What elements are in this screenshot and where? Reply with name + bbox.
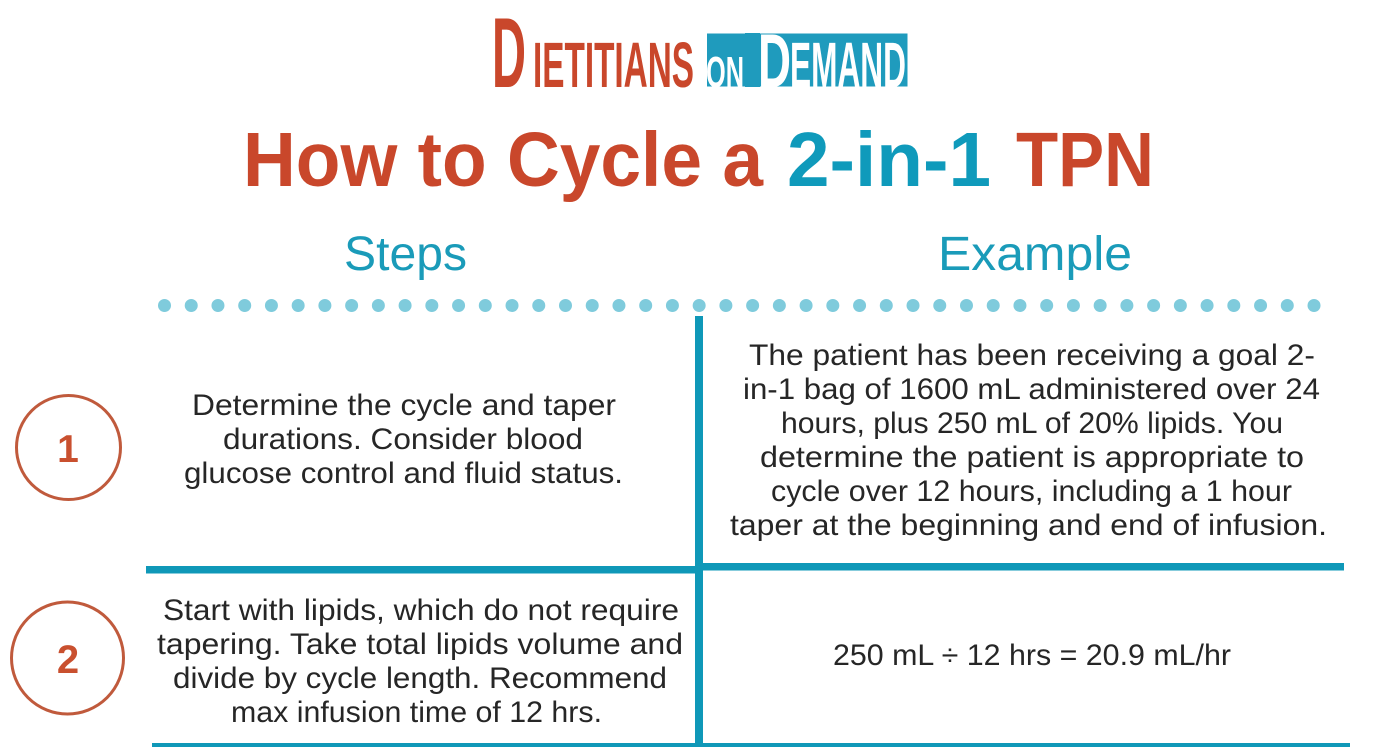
title: How to Cycle a xyxy=(243,117,764,203)
step 1 number badge: 1 xyxy=(57,428,79,471)
step 2 text xyxy=(157,594,683,729)
step 2 text: divide by cycle length. Recommend xyxy=(173,662,667,695)
logo: Dietitians on Demand: IETITIANS xyxy=(533,29,694,101)
step 1 text: durations. Consider blood xyxy=(223,423,583,456)
step 1 example text: determine the patient is appropriate to xyxy=(760,441,1304,474)
step 1 example text: taper at the beginning and end of infusion. xyxy=(730,509,1327,542)
step 1 text: Determine the cycle and taper xyxy=(192,389,616,422)
title xyxy=(243,117,1154,203)
title: 2-in-1 xyxy=(787,117,991,203)
step 1 example text: cycle over 12 hours, including a 1 hour xyxy=(771,475,1292,508)
logo: Dietitians on Demand: ON xyxy=(706,48,744,97)
logo: Dietitians on Demand: D xyxy=(492,0,526,108)
step 2 text: tapering. Take total lipids volume and xyxy=(157,628,683,661)
table grid lines xyxy=(146,316,1350,747)
step 1 example text: in-1 bag of 1600 mL administered over 24 xyxy=(743,373,1320,406)
heading: Example: Example xyxy=(938,228,1132,281)
step 1 text: glucose control and fluid status. xyxy=(184,457,623,490)
logo: Dietitians on Demand: D xyxy=(758,19,791,104)
step 1 example text: The patient has been receiving a goal 2- xyxy=(749,339,1315,372)
step 1 number badge xyxy=(16,396,120,500)
step 1 example text: hours, plus 250 mL of 20% lipids. You xyxy=(781,407,1283,440)
step 2 text: max infusion time of 12 hrs. xyxy=(231,696,602,729)
step 2 number badge xyxy=(12,602,124,714)
step 2 text: Start with lipids, which do not require xyxy=(163,594,679,627)
title: TPN xyxy=(1016,117,1154,203)
step 1 text xyxy=(184,389,623,490)
logo: Dietitians on Demand: EMAND xyxy=(790,29,906,101)
step 1 example text xyxy=(730,339,1327,542)
dotted divider xyxy=(164,299,1316,312)
heading: Steps: Steps xyxy=(344,228,467,281)
logo: Dietitians on Demand xyxy=(495,18,908,88)
step 2 number badge: 2 xyxy=(57,638,79,682)
step 2 example text: 250 mL ÷ 12 hrs = 20.9 mL/hr xyxy=(833,639,1231,672)
